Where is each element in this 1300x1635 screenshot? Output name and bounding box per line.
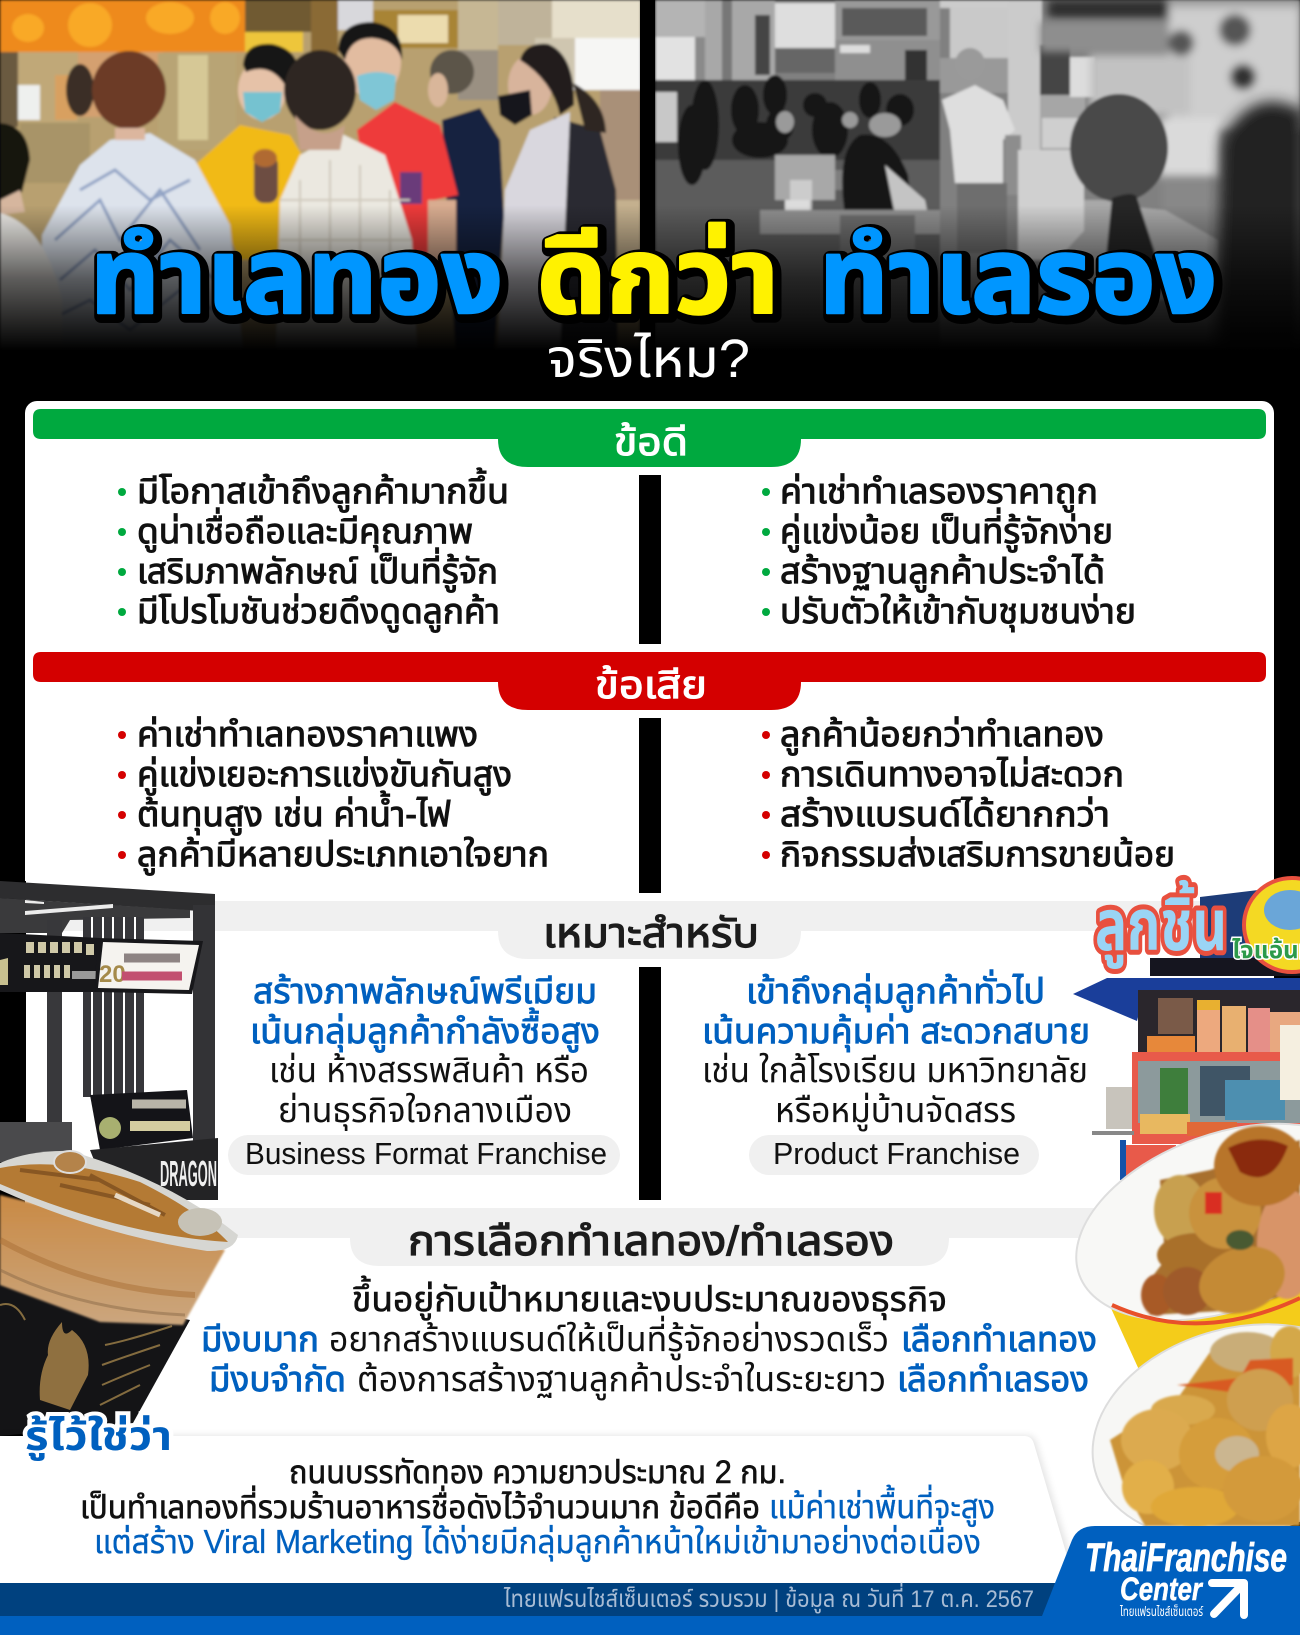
text: fact: แม้ค่าเช่าพื้นที่จะสูง — [769, 1484, 995, 1527]
title: ทำเลรอง — [822, 221, 1220, 339]
cart shelves and cups — [1138, 990, 1300, 1054]
list: cons secondary location: ลูกค้าน้อยกว่าทำเลทอง — [780, 715, 1104, 755]
person: yellow shirt — [195, 44, 305, 260]
person: woman in white and black — [498, 44, 618, 350]
text: fact: ถนนบรรทัดทอง ความยาวประมาณ 2 กม. — [289, 1454, 786, 1490]
title: ทำเลรอง — [819, 218, 1217, 336]
panel: cons — [33, 652, 1266, 893]
person: red shirt — [338, 22, 458, 280]
text: secondary location audience: เน้นความคุ้มค่า สะดวกสบาย — [702, 1012, 1090, 1052]
column divider — [639, 475, 661, 644]
text: secondary location audience — [702, 969, 1090, 1131]
heading: pros: ข้อดี — [614, 422, 688, 464]
illustration: fish balls in yellow bowl — [1049, 1086, 1300, 1372]
gray banner — [25, 901, 1274, 959]
list: cons secondary location: สร้างแบรนด์ได้ยากกว่า — [780, 795, 1110, 834]
menu board: lower — [90, 1090, 193, 1150]
subtitle: จริงไหม? — [547, 329, 750, 389]
text: secondary location audience: เข้าถึงกลุ่มลูกค้าทั่วไป — [746, 969, 1045, 1012]
heading: how to choose: การเลือกทำเลทอง/ทำเลรอง — [408, 1218, 894, 1264]
cart display case — [1092, 1025, 1300, 1185]
fade to black behind title — [0, 205, 1300, 351]
card shadow — [0, 1436, 1078, 1616]
footer band — [0, 1582, 1300, 1635]
text: decision: ต้องการสร้างฐานลูกค้าประจำในระยะยาว — [357, 1360, 886, 1400]
icon: arrow — [1212, 1583, 1244, 1615]
illustration: iced coffee cup — [0, 1151, 238, 1436]
text: decision: มีงบมาก — [201, 1320, 319, 1359]
list: pros prime location — [118, 467, 509, 632]
list: cons prime location: ค่าเช่าทำเลทองราคาแพง — [137, 715, 478, 754]
text: decision: ขึ้นอยู่กับเป้าหมายและงบประมาณของธุรกิจ — [352, 1275, 947, 1320]
text: prime location audience: เน้นกลุ่มลูกค้ากำลังซื้อสูง — [250, 1007, 600, 1052]
list: cons secondary location: กิจกรรมส่งเสริมการขายน้อย — [780, 835, 1175, 874]
list: pros prime location: มีโอกาสเข้าถึงลูกค้ามากขึ้น — [137, 467, 509, 512]
column divider — [639, 718, 661, 893]
title: ดีกว่า — [540, 221, 782, 339]
list: cons prime location: ต้นทุนสูง เช่น ค่าน้ำ-ไฟ — [137, 790, 451, 835]
list: pros secondary location: คู่แข่งน้อย เป็นที่รู้จักง่าย — [780, 507, 1113, 552]
red banner — [33, 652, 1266, 710]
cart roof — [1073, 978, 1300, 1021]
title — [90, 218, 1220, 339]
text: decision — [201, 1275, 1097, 1400]
photo: grayscale secondary-location crowd — [655, 0, 1300, 350]
menu board: light — [95, 938, 203, 994]
text: prime location audience: สร้างภาพลักษณ์พรีเมียม — [253, 972, 597, 1011]
cart upper frame — [1150, 885, 1300, 976]
list: pros secondary location: ปรับตัวให้เข้ากับชุมชนง่าย — [780, 592, 1136, 632]
column divider — [639, 967, 661, 1200]
text: decision: อยากสร้างแบรนด์ให้เป็นที่รู้จักอย่างรวดเร็ว — [329, 1315, 889, 1360]
illustration: kiosk — [0, 881, 218, 1200]
text: fact: แต่สร้าง Viral Marketing ได้ง่ายมีกลุ่มลูกค้าหน้าใหม่เข้ามาอย่างต่อเนื่อง — [94, 1519, 981, 1562]
menu board: dark — [0, 933, 100, 992]
list: pros secondary location — [762, 472, 1136, 632]
text: decision: มีงบจำกัด — [209, 1360, 346, 1399]
logo: ThaiFranchise Center: Center — [1120, 1571, 1203, 1607]
heading: suitable for: เหมาะสำหรับ — [543, 910, 759, 956]
blurred background — [1040, 0, 1300, 235]
person: far left — [0, 123, 62, 350]
panel: pros — [33, 409, 1266, 644]
person: navy shirt — [428, 50, 504, 350]
person: woman from behind with ponytail — [1052, 94, 1218, 300]
text: fact: เป็นทำเลทองที่รวมร้านอาหารชื่อดังไว้จำนวนมาก ข้อดีคือ — [80, 1485, 760, 1525]
card — [0, 1436, 1075, 1616]
panel: suitable for — [25, 901, 1274, 1200]
heading: did you know: รู้ไว้ใช่ว่า — [25, 1413, 172, 1461]
logo: ThaiFranchise Center — [1042, 1526, 1300, 1635]
white content panel — [25, 401, 1274, 1616]
person: patterned blue shirt — [41, 51, 243, 350]
logo: ThaiFranchise Center: ไทยแฟรนไชส์เซ็นเตอร์ — [1119, 1604, 1203, 1619]
person: balding man white shirt — [276, 50, 417, 350]
text: prime location audience: เช่น ห้างสรรพสินค้า หรือ — [269, 1051, 589, 1090]
list: pros secondary location: ค่าเช่าทำเลรองราคาถูก — [780, 472, 1098, 512]
text: secondary location audience: หรือหมู่บ้านจัดสรร — [775, 1091, 1016, 1131]
text: secondary location audience: เช่น ใกล้โรงเรียน มหาวิทยาลัย — [702, 1051, 1088, 1090]
list: pros prime location: มีโปรโมชันช่วยดึงดูดลูกค้า — [137, 592, 500, 632]
illustration: fried tofu in white bowl — [1068, 1293, 1300, 1571]
title: ทำเลทอง — [90, 218, 503, 336]
pill: business format franchise: Business Format Franchise — [245, 1136, 607, 1171]
list: cons prime location: ลูกค้ามีหลายประเภทเอาใจยาก — [137, 835, 549, 875]
illustration: street-food cart — [1073, 878, 1300, 1185]
text: decision: เลือกทำเลทอง — [901, 1320, 1097, 1359]
list: pros prime location: ดูน่าเชื่อถือและมีคุณภาพ — [137, 507, 473, 552]
crowd — [655, 74, 942, 310]
title: ทำเลทอง — [93, 221, 506, 339]
menu board: light: 20 — [99, 961, 126, 988]
counter with sign — [0, 1122, 218, 1200]
text: fact — [80, 1454, 995, 1562]
list: cons secondary location: การเดินทางอาจไม่สะดวก — [780, 755, 1124, 794]
panel: did you know — [0, 1413, 1078, 1616]
panel: how to choose — [25, 1208, 1274, 1400]
text: decision: เลือกทำเลรอง — [897, 1360, 1089, 1399]
green banner — [33, 409, 1266, 467]
title: ดีกว่า — [537, 218, 779, 336]
text: prime location audience — [250, 972, 600, 1131]
pill: product franchise: Product Franchise — [773, 1136, 1020, 1171]
photo: busy prime-location shoppers — [0, 0, 641, 350]
person: man in white shirt — [942, 48, 1021, 253]
list: pros prime location: เสริมภาพลักษณ์ เป็นที่รู้จัก — [137, 547, 498, 592]
text: prime location audience: ย่านธุรกิจใจกลางเมือง — [278, 1091, 572, 1131]
list: cons secondary location — [762, 715, 1175, 874]
text: DRAGON — [160, 1153, 217, 1194]
footer source text: ไทยแฟรนไชส์เซ็นเตอร์ รวบรวม | ข้อมูล ณ วันที่ 17 ต.ค. 2567 — [503, 1582, 1034, 1614]
list: pros secondary location: สร้างฐานลูกค้าประจำได้ — [780, 552, 1105, 592]
heading: cons: ข้อเสีย — [595, 665, 707, 707]
gray banner — [25, 1208, 1274, 1266]
cart sign: ลูกชิ้น: ลูกชิ้น — [1095, 879, 1227, 969]
list: cons prime location: คู่แข่งเยอะการแข่งขันกันสูง — [137, 755, 512, 795]
list: cons prime location — [118, 715, 549, 875]
